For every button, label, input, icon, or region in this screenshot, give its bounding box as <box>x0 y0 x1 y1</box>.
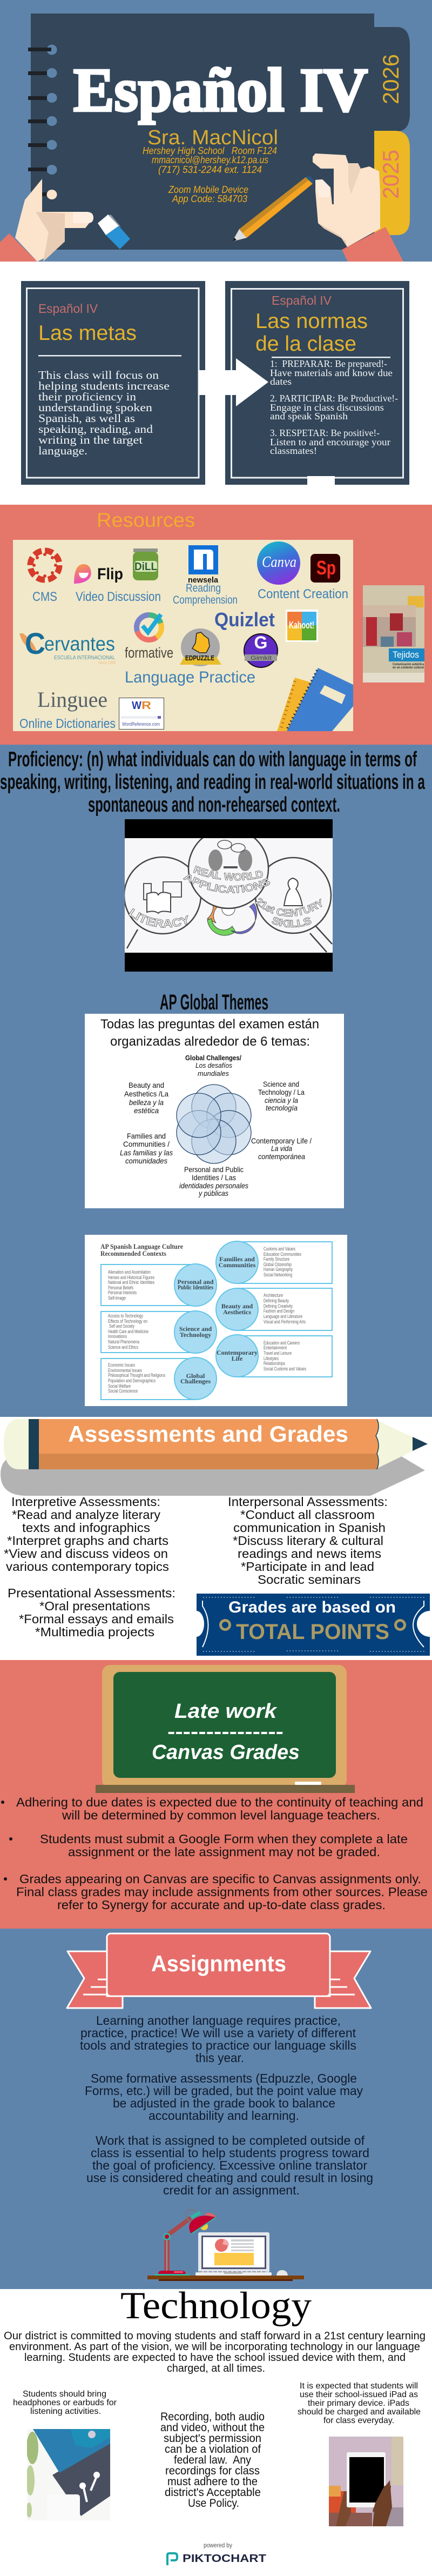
panel: white intro background <box>0 262 432 505</box>
heading: Resources: Resources <box>97 509 195 531</box>
card: families and communities: Family Structure <box>264 1256 289 1262</box>
title: Español IV <box>73 56 368 124</box>
text: ipad expectation: use their school-issued iPad as <box>300 2390 418 2399</box>
callout: total points ticket: TOTAL POINTS <box>236 1620 389 1644</box>
label: global challenges <box>185 1054 241 1078</box>
label: beauty and aesthetics: Aesthetics /La <box>124 1089 168 1098</box>
text: goals: helping students increase <box>38 379 170 392</box>
label: contemporary life: Contemporary Life / <box>251 1136 312 1145</box>
text: rules: Engage in class discussions <box>270 402 384 413</box>
year 2025: 2025 <box>378 150 403 199</box>
card: beauty and aesthetics: Visual and Performing Arts <box>264 1319 306 1324</box>
footer: Piktochart logo <box>167 2553 266 2565</box>
image: tablet keyboard and earbuds <box>26 2429 110 2520</box>
text: technology intro: charged, at all times. <box>167 2363 265 2374</box>
panel: Las normas de la clase <box>225 281 409 485</box>
card: beauty and aesthetics: Aesthetics <box>223 1308 251 1316</box>
label: science and technology: ciencia y la <box>265 1096 298 1105</box>
teacher name: Sra. MacNicol <box>147 126 278 149</box>
label: Video Discussion: Video Discussion <box>76 590 161 604</box>
callout: total points ticket <box>189 1594 432 1656</box>
heading: recommended contexts: AP Spanish Language Culture <box>100 1242 183 1250</box>
text: headphones <box>13 2390 117 2416</box>
contact details: Hershey High School Room F124 <box>143 145 277 156</box>
icon: WordReference <box>119 698 164 730</box>
panel: resources <box>0 505 432 745</box>
callout: total points ticket: Grades are based on <box>228 1598 396 1616</box>
icon: notebooks <box>277 668 353 731</box>
icon: Dill jar <box>133 548 158 580</box>
label: personal and public identities: Identities / Las <box>192 1173 236 1182</box>
text: themes intro: organizadas alrededor de 6 temas: <box>110 1034 310 1049</box>
text: assignments paragraph 2: Some formative assessments (Edpuzzle, Google <box>91 2071 357 2085</box>
icon: dark tab 2026 <box>374 27 410 131</box>
card: beauty and aesthetics: Language and Literature <box>264 1314 302 1319</box>
card: science and technology: Access to Technology <box>108 1313 143 1319</box>
icon: Flip logo: Flip <box>97 565 123 583</box>
icon: notebook cover <box>31 14 374 250</box>
image: hands holding ipad <box>329 2437 403 2526</box>
icon: Canva <box>257 541 300 585</box>
card: personal and public identities: Personal Interests <box>108 1290 137 1295</box>
text: late work bullets <box>1 1795 428 1912</box>
text: proficiency definition <box>0 748 425 817</box>
text: late work bullets: refer to Synergy for accurate and up-to-date class grades. <box>57 1898 386 1912</box>
panel: recommended contexts <box>85 1235 347 1406</box>
card: contemporary life: Lifestyles <box>264 1356 279 1361</box>
card: personal and public identities: Personal Beliefs <box>108 1285 133 1290</box>
card: personal and public identities: Alienation and Assimilation <box>108 1269 151 1275</box>
text: themes intro <box>100 1017 319 1049</box>
icon: pencil <box>232 176 315 242</box>
text: goals <box>38 369 170 457</box>
icon: Cervantes: Since 1986 <box>98 660 116 665</box>
text: late work bullets: Final class grades may include assignments from other sources. Please <box>16 1885 428 1899</box>
text: ipad expectation: their primary device. iPads <box>308 2399 409 2408</box>
card: science and technology: Science and <box>179 1325 212 1333</box>
panel: six themes diagram <box>85 1014 344 1208</box>
icon: Kahoot: Kahoot! <box>289 620 314 631</box>
icon: Edpuzzle: EDPUZZLE <box>185 654 214 662</box>
text: interpretive assessments: *View and discuss videos on <box>4 1547 168 1561</box>
label: personal and public identities: y públicas <box>198 1189 228 1197</box>
card: beauty and aesthetics: Architecture <box>264 1293 283 1298</box>
label: personal and public identities: identidades personales <box>179 1181 248 1190</box>
text: assignments paragraph 2 <box>85 2071 363 2123</box>
label: contemporary life: contemporánea <box>258 1152 305 1161</box>
label: Content Creation: Content Creation <box>258 587 348 601</box>
panel: assignments <box>0 1929 432 2289</box>
card: global challenges: Environmental Issues <box>108 1368 142 1373</box>
label: Reading Comprehension <box>173 582 238 606</box>
card: contemporary life: Contemporary <box>217 1349 258 1356</box>
icon: Quizlet: Quizlet <box>214 608 275 631</box>
text: goals: Spanish, as well as <box>38 412 135 425</box>
card: global challenges: Social Conscience <box>108 1388 138 1394</box>
text: late work bullets: Adhering to due dates is expected due to the continuity of teaching and <box>16 1795 423 1809</box>
text: rules: and speak Spanish <box>270 411 348 421</box>
text: late work bullets: will be determined by common level language teachers. <box>62 1808 380 1822</box>
heading: AP Global Themes: AP Global Themes <box>160 991 268 1014</box>
icon: Newsela <box>188 545 219 585</box>
card: science and technology: Science and Ethics <box>108 1344 138 1350</box>
label: families and communities: Communities / <box>123 1140 170 1148</box>
icon: Adobe Express Sp: Sp <box>316 557 336 579</box>
card: global challenges: Population and Demographics <box>108 1378 156 1383</box>
card: science and technology: Natural Phenomena <box>108 1339 139 1344</box>
icon: Cervantes: ervantes <box>44 633 115 655</box>
icon: ribbon banner <box>67 1933 371 2008</box>
icon: Flip logo <box>74 564 123 584</box>
text: goals: This class will focus on <box>38 369 159 382</box>
heading: Assessments and Grades: Assessments and Grades <box>68 1421 348 1447</box>
icon: Cervantes: C <box>25 626 45 660</box>
chart: venn flower <box>177 1085 251 1163</box>
text: late work bullets: Students must submit a Google Form when they complete a late <box>40 1832 408 1846</box>
card: global challenges: Economic Issues <box>108 1362 135 1368</box>
text: recording policy: Use Policy. <box>188 2497 239 2510</box>
card: contemporary life <box>216 1335 332 1377</box>
panel: hero header <box>0 0 432 262</box>
text: assignments paragraph 3: class is essential to help students progress toward <box>91 2146 369 2160</box>
text: goals: understanding spoken <box>38 401 153 414</box>
text: presentational assessments: Presentational Assessments: <box>8 1586 176 1600</box>
text: ipad expectation: for class everyday. <box>323 2416 394 2425</box>
card: science and technology: Effects of Technology on <box>108 1319 147 1324</box>
card: beauty and aesthetics: Beauty and <box>221 1302 253 1310</box>
text: presentational assessments: *Formal essays and emails <box>19 1612 174 1626</box>
image: Tejidos textbook: Comunicación auténtica <box>393 663 424 666</box>
label: science and technology <box>258 1080 305 1112</box>
footer: powered by: powered by <box>204 2541 232 2549</box>
card: science and technology: Self and Society <box>109 1323 134 1329</box>
text: technology intro <box>4 2330 426 2374</box>
icon: left hand <box>0 179 93 262</box>
icon: eraser <box>98 215 130 249</box>
card: science and technology: Innovations <box>108 1334 127 1339</box>
text: technology intro: Our district is committed to moving students and staff forward in a 21st century learning <box>4 2330 426 2342</box>
text: recording policy <box>160 2411 265 2510</box>
text: assignments paragraph 2: be adjusted in the grade book to balance <box>113 2096 335 2110</box>
icon: chalkboard: --------------- <box>167 1722 284 1742</box>
card: global challenges: Philosophical Thought and Religions <box>108 1373 165 1378</box>
label: beauty and aesthetics: Beauty and <box>129 1081 164 1089</box>
text: interpretive assessments <box>4 1495 169 1574</box>
panel: resource board <box>13 540 353 731</box>
text: ipad expectation <box>298 2381 421 2425</box>
icon: Canvas <box>30 551 59 580</box>
icon: Kahoot <box>286 610 318 642</box>
label: families and communities: comunidades <box>125 1156 167 1165</box>
card: families and communities: Social Networking <box>264 1272 292 1277</box>
arrow <box>199 358 268 406</box>
heading: recommended contexts <box>100 1242 183 1257</box>
text: technology intro: environment. As part of the vision, we will be incorporating technology in our language <box>9 2341 420 2353</box>
label: science and technology: tecnología <box>266 1103 298 1112</box>
label: contemporary life <box>251 1136 312 1161</box>
icon: Cervantes <box>19 626 116 665</box>
icon: Newsela: newsela <box>188 576 219 585</box>
card: beauty and aesthetics: Defining Beauty <box>264 1298 289 1303</box>
card: families and communities: Education Communities <box>264 1252 301 1257</box>
text: rules: classmates! <box>270 445 317 456</box>
heading: Canvas Grades: Canvas Grades <box>152 1741 300 1764</box>
card: beauty and aesthetics: Defining Creativity <box>264 1303 293 1309</box>
text: goals: language. <box>38 444 87 457</box>
icon: WordReference: R <box>141 700 152 712</box>
text: rules: Have materials and know due <box>270 367 393 378</box>
icon: Adobe Express Sp <box>310 554 340 583</box>
label: beauty and aesthetics: belleza y la <box>129 1098 164 1107</box>
icon: yellow tab 2025 <box>374 131 410 235</box>
text: recording policy: recordings for class <box>165 2465 260 2477</box>
contact details: App Code: 584703 <box>172 193 247 204</box>
text: interpretive assessments: Interpretive Assessments: <box>11 1495 160 1509</box>
text: interpretive assessments: *Read and analyze literary <box>12 1508 160 1522</box>
label: science and technology: Science and <box>263 1080 299 1088</box>
card: families and communities: Customs and Values <box>264 1246 295 1252</box>
heading: Las normas de la clase: de la clase <box>255 332 356 356</box>
label: Language Practice: Language Practice <box>125 668 255 686</box>
text: recording policy: district's Acceptable <box>165 2486 261 2499</box>
image: video still real world applications: SKILLS <box>272 917 312 927</box>
heading: Late work: Late work <box>174 1700 278 1723</box>
card: contemporary life: Education and Careers <box>264 1340 300 1346</box>
image: video still real world applications: APPLICATIONS <box>183 874 270 893</box>
text: assignments paragraph 1: tools and strategies to practice our language skills <box>80 2038 356 2052</box>
text: assignments paragraph 2: accountability and learning. <box>148 2109 299 2123</box>
label: Online Dictionaries: Online Dictionaries <box>19 717 116 731</box>
card: contemporary life: Travel and Leisure <box>264 1350 292 1356</box>
icon: Dill jar: DiLL <box>134 561 157 573</box>
label: beauty and aesthetics: estética <box>134 1106 159 1115</box>
card: global challenges <box>101 1357 217 1400</box>
panel: assessments and grades <box>0 1417 432 1660</box>
label: personal and public identities <box>179 1165 248 1197</box>
text: recording policy: subject's permission <box>164 2432 261 2445</box>
image: video still real world applications: 21st CENTURY <box>255 898 322 916</box>
text: assignments paragraph 3: the goal of proficiency. Excessive online translator <box>92 2158 367 2172</box>
text: assignments paragraph 1: this year. <box>195 2051 244 2065</box>
text: assignments paragraph 1: practice, practice! We will use a variety of different <box>80 2026 356 2040</box>
contact details <box>143 145 277 204</box>
heading: Las normas de la clase <box>255 310 368 356</box>
label: Reading Comprehension: Comprehension <box>173 594 238 606</box>
label: global challenges: mundiales <box>198 1069 229 1078</box>
text: interpersonal assessments <box>228 1495 388 1587</box>
text: interpersonal assessments: *Participate in and lead <box>241 1560 374 1574</box>
icon: spiral binding <box>28 44 57 199</box>
icon: Cervantes: ESCUELA INTERNACIONAL <box>54 655 115 661</box>
text: interpretive assessments: *Interpret graphs and charts <box>7 1534 168 1548</box>
icon: WordReference: W <box>132 700 141 712</box>
text: goals: writing in the target <box>38 433 143 446</box>
text: recording policy: federal law. Any <box>174 2454 251 2466</box>
text: assignments paragraph 1 <box>80 2013 356 2065</box>
text: ipad expectation: It is expected that students will <box>300 2381 418 2391</box>
text: ipad expectation: should be charged and available <box>298 2407 421 2417</box>
text: assignments paragraph 2: Forms, etc.) will be graded, but the point value may <box>85 2084 363 2098</box>
year 2026: 2026 <box>378 54 403 104</box>
heading: Las normas de la clase: Las normas <box>255 310 368 333</box>
icon: right hand <box>313 153 403 262</box>
image: video still real world applications: REAL WORLD <box>193 866 263 881</box>
label: families and communities: Las familias y las <box>120 1148 173 1157</box>
label: course: Español IV <box>272 293 332 307</box>
text: interpretive assessments: texts and infographics <box>22 1521 150 1535</box>
card: global challenges: Social Welfare <box>108 1383 131 1389</box>
card: global challenges: Challenges <box>180 1377 211 1385</box>
heading: recommended contexts: Recommended Contexts <box>100 1249 166 1257</box>
card: contemporary life: Relationships <box>264 1361 285 1366</box>
text: assignments paragraph 3 <box>86 2133 373 2197</box>
contact details: Zoom Mobile Device <box>168 184 248 195</box>
image: Tejidos textbook: Tejidos <box>393 650 419 660</box>
icon: WordReference: WordReference.com <box>122 721 160 727</box>
footer: Piktochart logo: PIKTOCHART <box>183 2553 266 2565</box>
text: rules: 2. PARTICIPAR: Be Productive!- <box>270 393 398 404</box>
text: recording policy: and video, without the <box>160 2421 265 2434</box>
text: goals: their proficiency in <box>38 390 137 403</box>
label: families and communities: Families and <box>127 1132 166 1140</box>
contact details: (717) 531-2244 ext. 1124 <box>158 164 262 175</box>
icon: chalkboard <box>96 1665 355 1793</box>
icon: lamp and laptop on desk <box>147 2210 304 2281</box>
panel: technology <box>0 2285 432 2576</box>
text: interpersonal assessments: *Discuss literary & cultural <box>233 1534 383 1548</box>
card: beauty and aesthetics <box>216 1288 332 1330</box>
icon: Formative: formative <box>125 645 173 661</box>
text: interpersonal assessments: readings and news items <box>238 1547 381 1561</box>
card: personal and public identities <box>101 1264 217 1306</box>
label: CMS: CMS <box>32 590 57 604</box>
label: Reading Comprehension: Reading <box>186 582 221 594</box>
image: video still real world applications: LITERACY <box>129 908 188 928</box>
icon: Formative <box>125 614 173 661</box>
icon: Gimkit: G <box>254 633 267 652</box>
text: technology intro: learning. Students are expected to have the school issued device with them, and <box>24 2352 406 2364</box>
card: personal and public identities: National and Ethnic Identities <box>108 1280 154 1285</box>
icon: Linguee: Linguee <box>37 687 107 712</box>
card: families and communities: Communities <box>219 1261 256 1269</box>
icon: Gimkit: Gimkit <box>251 655 272 661</box>
card: families and communities: Families and <box>219 1255 255 1263</box>
text: recording policy: can be a violation of <box>165 2443 261 2455</box>
text: rules: 3. RESPETAR: Be positive!- <box>270 427 380 438</box>
card: personal and public identities: Heroes and Historical Figures <box>108 1275 154 1280</box>
image: video still real world applications <box>125 819 333 972</box>
text: interpersonal assessments: Socratic seminars <box>258 1573 361 1587</box>
card: contemporary life: Social Customs and Values <box>264 1366 306 1371</box>
text: themes intro: Todas las preguntas del examen están <box>100 1017 319 1032</box>
panel: late work <box>0 1660 432 1929</box>
contact details: mmacnicol@hershey.k12.pa.us <box>152 155 268 165</box>
text: headphones: listening activities. <box>30 2407 101 2416</box>
text: interpersonal assessments: communication in Spanish <box>233 1521 386 1535</box>
icon: Canva: Canva <box>262 554 296 571</box>
image: Tejidos textbook: en un contexto cultural <box>393 666 424 670</box>
text: recording policy: Recording, both audio <box>160 2411 265 2423</box>
icon: Edpuzzle <box>180 628 221 666</box>
text: presentational assessments <box>8 1586 176 1639</box>
heading: Technology: Technology <box>120 2285 312 2327</box>
label: families and communities <box>120 1132 173 1165</box>
text: headphones: Students should bring <box>23 2390 106 2399</box>
card: beauty and aesthetics: Fashion and Design <box>264 1308 294 1314</box>
text: late work bullets: assignment or the late assignment may not be graded. <box>68 1845 380 1859</box>
label: global challenges: Los desafíos <box>195 1061 232 1069</box>
text: late work bullets: Grades appearing on Canvas are specific to Canvas assignments only. <box>19 1872 421 1886</box>
label: beauty and aesthetics <box>124 1081 168 1115</box>
icon: pencil banner <box>1 1419 428 1496</box>
card: personal and public identities: Personal and <box>177 1278 214 1286</box>
panel: proficiency and AP themes <box>0 745 432 1417</box>
image: Tejidos textbook <box>363 585 424 683</box>
card: families and communities: Human Geography <box>264 1267 293 1272</box>
card: science and technology: Health Care and Medicine <box>108 1329 148 1334</box>
text: presentational assessments: *Oral presentations <box>39 1599 150 1613</box>
text: goals: speaking, reading, and <box>38 423 153 436</box>
text: interpretive assessments: various contemporary topics <box>6 1560 169 1574</box>
text: interpersonal assessments: *Conduct all classroom <box>240 1508 375 1522</box>
text: assignments paragraph 3: credit for an assignment. <box>163 2183 300 2197</box>
label: personal and public identities: Personal and Public <box>184 1165 244 1174</box>
label: science and technology: Technology / La <box>258 1088 305 1096</box>
text: rules: 1: PREPARAR: Be prepared!- <box>270 358 387 369</box>
text: headphones: headphones or earbuds for <box>13 2398 117 2407</box>
card: personal and public identities: Public Identities <box>178 1283 213 1291</box>
text: interpersonal assessments: Interpersonal Assessments: <box>228 1495 388 1509</box>
heading: Assignments: Assignments <box>151 1951 286 1976</box>
label: contemporary life: La vida <box>271 1144 292 1153</box>
card: families and communities <box>216 1241 332 1283</box>
label: global challenges: Global Challenges/ <box>185 1054 241 1062</box>
card: science and technology <box>101 1311 217 1353</box>
card: science and technology: Technology <box>180 1331 211 1339</box>
icon: Gimkit <box>244 633 278 667</box>
panel: Las metas <box>21 281 205 485</box>
label: course: Español IV <box>38 302 98 316</box>
text: presentational assessments: *Multimedia projects <box>35 1625 154 1639</box>
card: global challenges: Global <box>186 1372 205 1380</box>
text: recording policy: must adhere to the <box>167 2475 258 2488</box>
text: rules <box>270 358 398 456</box>
card: contemporary life: Entertainment <box>264 1345 287 1350</box>
text: rules: dates <box>270 376 292 387</box>
text: assignments paragraph 1: Learning another language requires practice, <box>96 2013 341 2028</box>
card: contemporary life: Life <box>232 1355 243 1362</box>
heading: Las metas: Las metas <box>38 322 137 345</box>
card: families and communities: Global Citizenship <box>264 1262 292 1267</box>
text: assignments paragraph 3: use is considered cheating and could result in losing <box>86 2171 373 2185</box>
card: personal and public identities: Self-Image <box>108 1295 126 1301</box>
text: rules: Listen to and encourage your <box>270 437 390 447</box>
text: assignments paragraph 3: Work that is assigned to be completed outside of <box>96 2133 365 2147</box>
